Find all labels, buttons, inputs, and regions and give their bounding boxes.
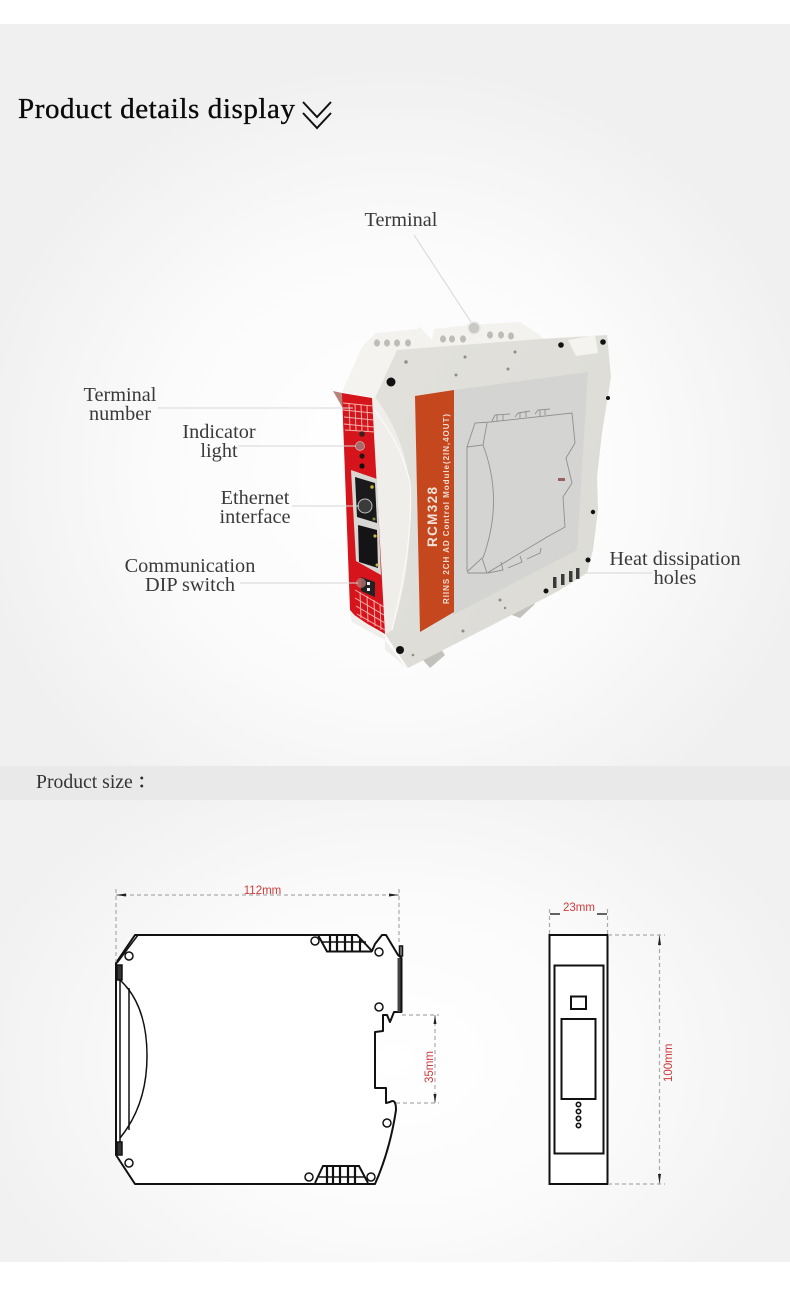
dimension: 35mm: 35mm [424, 1051, 436, 1083]
ethernet port 1 [355, 477, 377, 523]
heading: product details display: Product details display [18, 93, 296, 125]
callout marker: terminal [468, 322, 480, 334]
dimension: 23mm: 23mm [563, 902, 595, 914]
background panel: product size [0, 800, 790, 1262]
dimension: 100mm [608, 935, 675, 1184]
callout: Communication DIP switch [125, 555, 358, 596]
top connector [318, 935, 372, 952]
white front strip [372, 398, 410, 634]
housing outline [116, 935, 402, 1184]
callout: Terminal [365, 209, 471, 322]
mounting holes [125, 937, 391, 1181]
vent slots [568, 335, 598, 356]
indicator dots [576, 1102, 581, 1128]
ethernet port 2 [358, 525, 378, 568]
callout: Terminal number [84, 384, 353, 425]
callout: Indicator light: Indicator [182, 421, 256, 443]
callout: Ethernet interface [220, 487, 359, 528]
dimension: 23mm [550, 902, 608, 934]
red front panel [333, 391, 406, 668]
terminal number grid [343, 403, 385, 630]
callout: Ethernet interface: Ethernet [221, 487, 290, 509]
curved highlight line [373, 408, 411, 630]
callout: Terminal number: Terminal [84, 384, 157, 406]
screw holes [386, 339, 610, 654]
dimension: 112mm [116, 885, 399, 962]
callout: Indicator light: light [200, 440, 238, 462]
label text: module name: RIINS 2CH AD Control Module(2IN,4OUT) [442, 414, 451, 604]
dimension: 112mm: 112mm [244, 885, 281, 897]
callout: Indicator light [182, 421, 356, 462]
background panel: product details [0, 24, 790, 766]
heat dissipation slots [553, 568, 580, 588]
ethernet port frame [351, 470, 381, 575]
bottom feet [423, 648, 445, 668]
callout: Heat dissipation holes: Heat dissipation [609, 548, 741, 570]
label recess [453, 372, 588, 615]
callout: Heat dissipation holes [586, 548, 741, 589]
dimension: 35mm [396, 1015, 439, 1103]
band: product size heading: Product size： [36, 769, 150, 793]
side view drawing [116, 885, 439, 1184]
top face [342, 347, 397, 398]
callout: Terminal number: number [89, 403, 151, 425]
dimension: 100mm: 100mm [663, 1044, 675, 1082]
terminal blocks on top [362, 322, 548, 382]
callout: Ethernet interface: interface [220, 506, 290, 528]
small window [571, 996, 586, 1009]
outer housing [550, 935, 608, 1184]
bottom connector [315, 1166, 368, 1184]
main grey housing [375, 335, 611, 668]
module outline illustration [467, 409, 575, 573]
callout: Heat dissipation holes: holes [654, 567, 697, 589]
callout: Communication DIP switch: DIP switch [145, 574, 235, 596]
inner panel [554, 966, 604, 1154]
product photo: RCM328 DIN rail module [333, 322, 611, 668]
left edge details [117, 935, 402, 1155]
front view drawing [550, 902, 675, 1184]
callout: Communication DIP switch: Communication [125, 555, 255, 577]
indicator lights [356, 431, 365, 469]
band: product size heading [0, 766, 790, 800]
orange product label [415, 390, 454, 632]
icon: double chevron [303, 102, 331, 128]
label text: RCM328: RCM328 [425, 487, 440, 547]
port window [562, 1019, 596, 1099]
DIP switch [356, 577, 375, 597]
callout: Terminal: Terminal [365, 209, 438, 231]
